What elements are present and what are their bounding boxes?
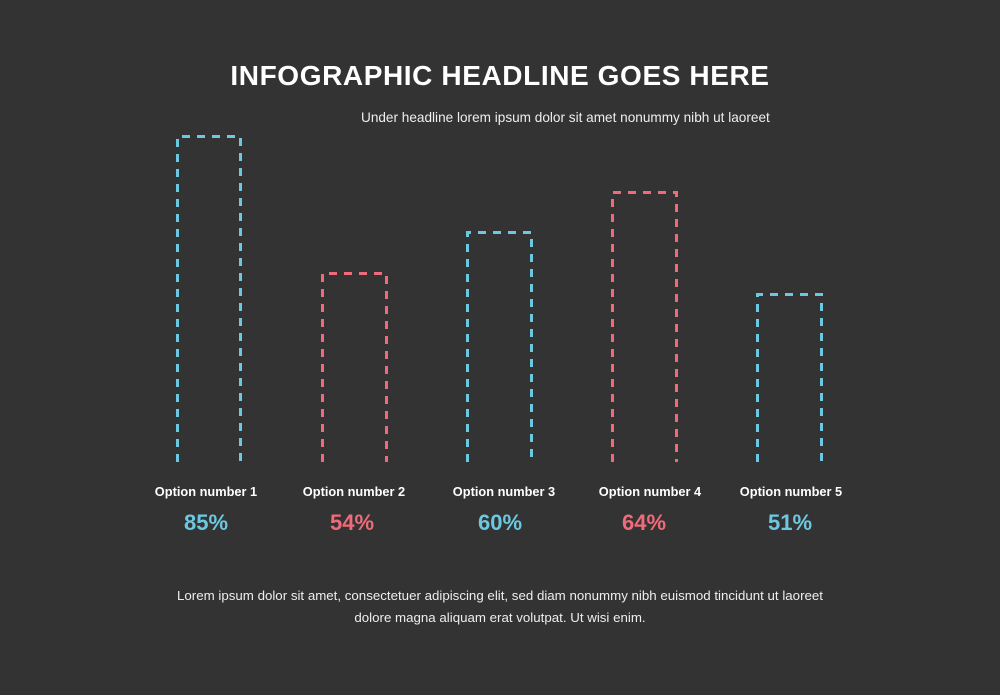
body text: dolore magna aliquam erat volutpat. Ut wisi enim. <box>354 610 646 625</box>
labels: 85% <box>184 510 228 535</box>
bar 4 <box>612 192 676 462</box>
labels: 64% <box>622 510 666 535</box>
labels: Option number 2 <box>303 484 405 499</box>
labels: Option number 1 <box>155 484 257 499</box>
bar 1 <box>178 136 240 462</box>
labels: Option number 3 <box>453 484 555 499</box>
bar 5 <box>758 294 822 462</box>
labels: 51% <box>768 510 812 535</box>
labels: 60% <box>478 510 522 535</box>
body text: Lorem ipsum dolor sit amet, consectetuer adipiscing elit, sed diam nonummy nibh euismod tincidunt ut laoreet <box>177 588 823 603</box>
body text <box>177 588 823 625</box>
labels: Option number 4 <box>599 484 701 499</box>
bar 3 <box>468 232 532 462</box>
title: INFOGRAPHIC HEADLINE GOES HERE <box>230 60 770 91</box>
labels: 54% <box>330 510 374 535</box>
subtitle: Under headline lorem ipsum dolor sit amet nonummy nibh ut laoreet <box>361 110 770 125</box>
bar 2 <box>322 274 386 462</box>
labels: Option number 5 <box>740 484 842 499</box>
